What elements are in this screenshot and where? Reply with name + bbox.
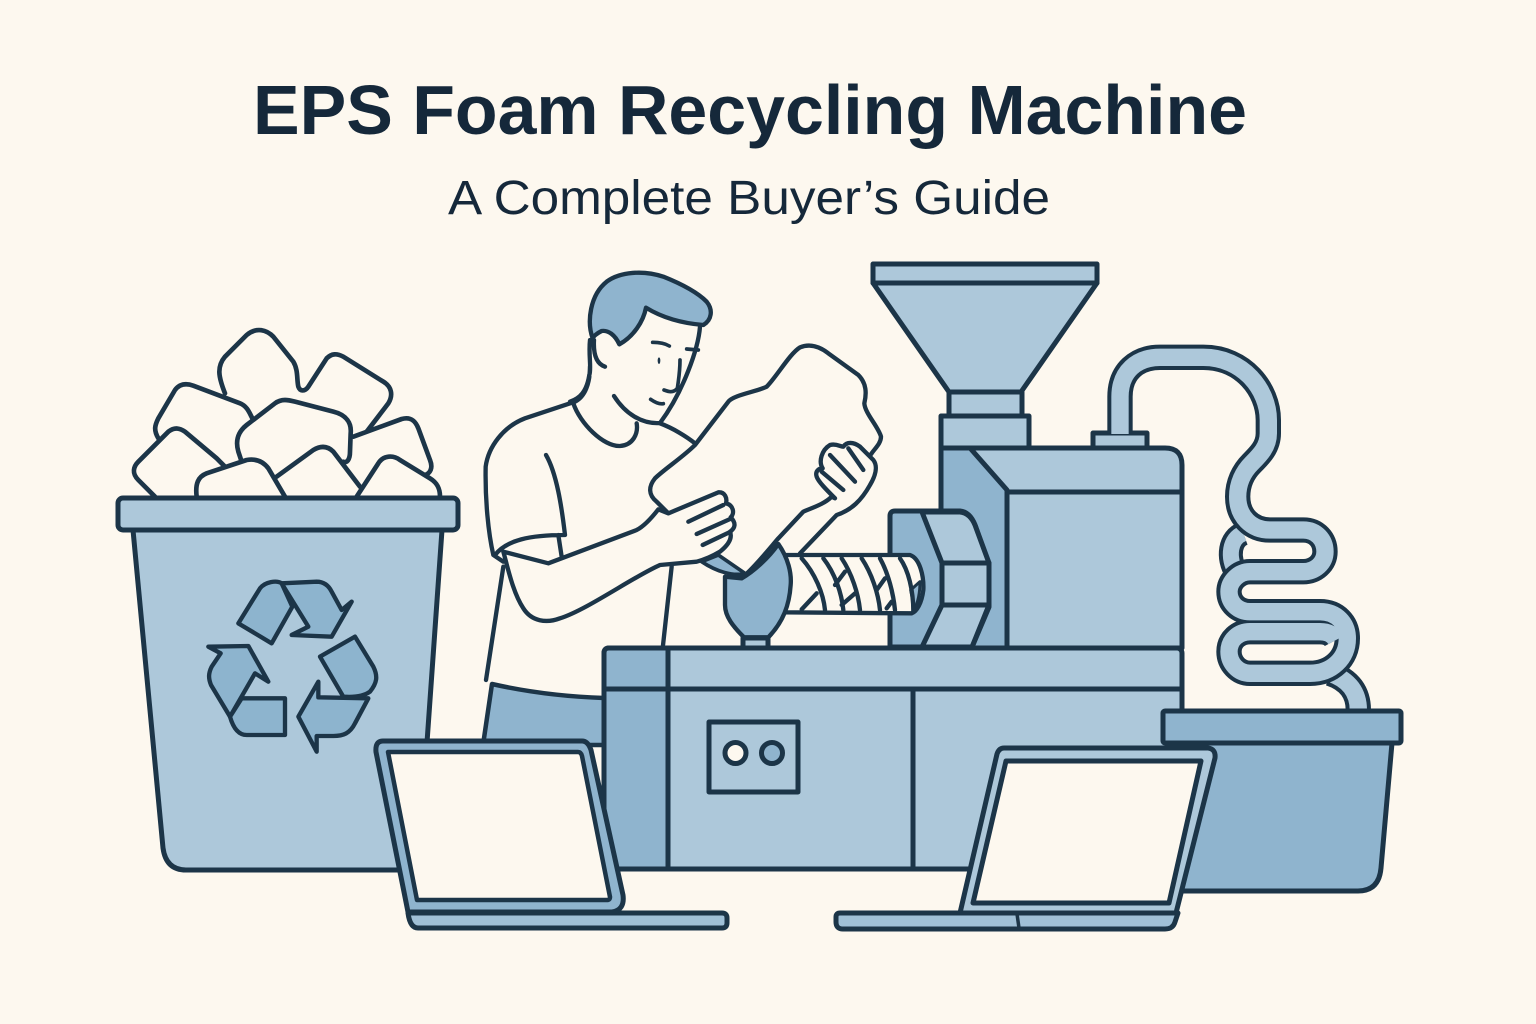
nozzle stem — [743, 638, 768, 648]
left laptop — [376, 741, 727, 928]
left arm — [503, 492, 735, 621]
shirt sides — [486, 567, 672, 680]
collar — [573, 403, 637, 446]
title: EPS Foam Recycling Machine — [253, 71, 1247, 149]
housing side panel — [941, 448, 1007, 648]
head — [570, 273, 711, 423]
icon: recycling symbol — [208, 582, 376, 752]
hopper rim — [873, 264, 1097, 283]
base left panel — [604, 648, 668, 869]
hex nut — [890, 511, 989, 647]
person — [483, 273, 881, 745]
recycling machine — [604, 264, 1358, 869]
indicator knob — [762, 742, 782, 764]
hose — [1120, 357, 1358, 710]
facial features — [651, 342, 698, 404]
upper housing — [941, 448, 1182, 648]
subtitle: A Complete Buyer’s Guide — [448, 172, 1050, 225]
collar — [941, 416, 1029, 448]
trousers — [483, 684, 604, 745]
bin body — [133, 530, 442, 870]
hopper funnel — [873, 283, 1097, 392]
ear and neck — [570, 340, 605, 402]
laptop lid — [376, 741, 623, 912]
laptop base — [836, 913, 1178, 929]
hair — [590, 273, 711, 344]
right laptop — [836, 748, 1215, 929]
machine base — [604, 648, 1182, 869]
shoulders and shirt — [486, 367, 590, 562]
nozzle bulb — [725, 544, 791, 637]
hand tail sliver — [702, 555, 745, 574]
laptop screen — [973, 761, 1201, 903]
control panel — [709, 722, 798, 792]
hose port — [1093, 433, 1147, 448]
laptop lid — [960, 748, 1215, 913]
torso — [486, 367, 695, 680]
indicator light — [725, 742, 746, 764]
foam block held — [650, 346, 881, 577]
face — [589, 273, 703, 423]
arms and hands — [503, 443, 876, 621]
waste collection bowl — [1163, 711, 1401, 891]
laptop screen — [388, 752, 610, 900]
hopper neck — [949, 392, 1022, 416]
recycling bin with foam — [118, 330, 458, 870]
bin rim — [118, 498, 458, 530]
laptop base — [408, 913, 727, 928]
foam blocks — [134, 330, 440, 497]
extruder screw — [783, 555, 923, 613]
bowl rim — [1163, 711, 1401, 743]
right arm — [743, 443, 876, 577]
